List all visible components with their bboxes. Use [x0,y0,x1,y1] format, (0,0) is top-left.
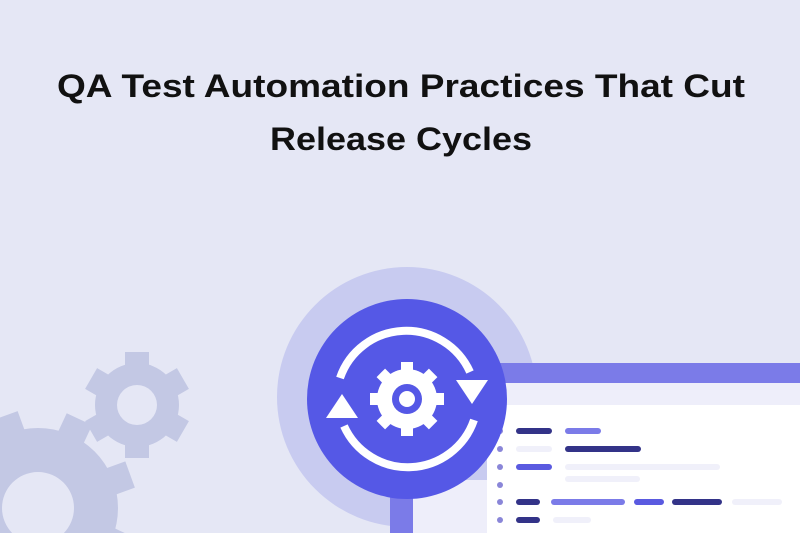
icon: large background gear [0,411,135,533]
gear [370,362,444,436]
title: Release Cycles [270,121,532,157]
title: QA Test Automation Practices That Cut [57,68,745,104]
outer halo circle [277,267,537,527]
arrows [340,331,474,467]
code lines [497,428,782,523]
title [57,68,745,157]
illustration [0,267,800,533]
icon: automation cycle badge [307,299,507,499]
icon: small background gear [85,352,189,458]
panel: code window [390,363,800,533]
